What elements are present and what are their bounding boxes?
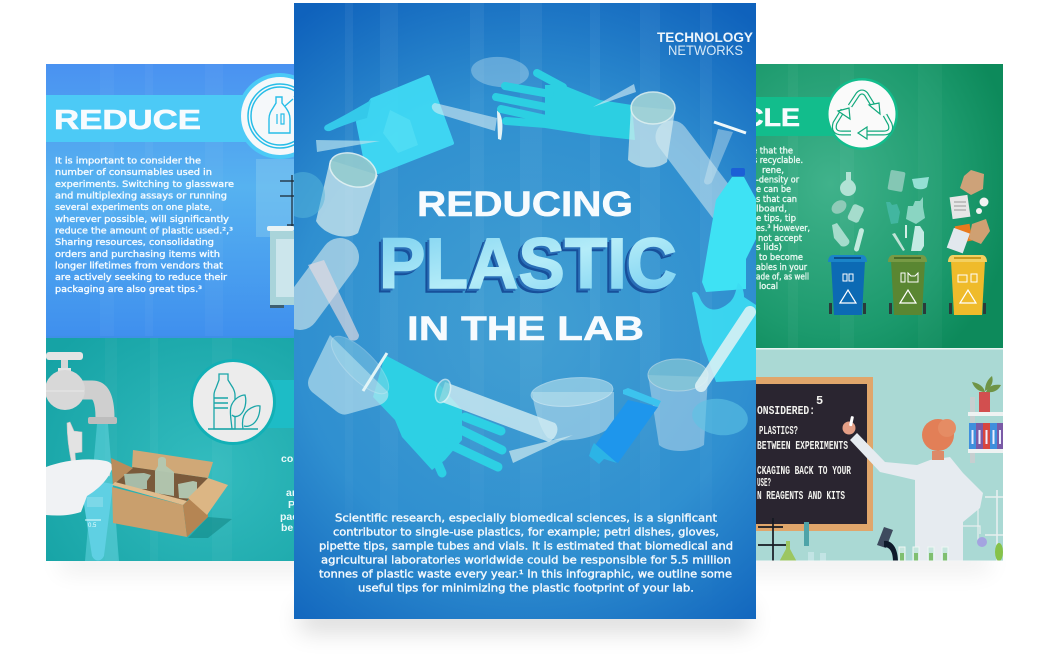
recycle body text: ade of, as well xyxy=(756,272,809,282)
recycle body text: lboard, xyxy=(756,204,787,214)
chalkboard: N REAGENTS AND KITS xyxy=(757,489,845,503)
clipped reuse text: an xyxy=(286,487,298,499)
illustration: small tube left xyxy=(308,260,359,341)
recycle body text: s lids) xyxy=(756,243,782,253)
intro paragraph: pipette tips, sample tubes and vials. It is estimated that biomedical and xyxy=(319,540,733,552)
illustration: petri dish top xyxy=(471,56,529,88)
clipped reuse text: be xyxy=(281,522,293,534)
reduce body text: experiments. Switching to glassware xyxy=(55,180,234,190)
icon: recycle symbol xyxy=(826,78,898,150)
reduce body text: longer lifetimes from vendors that xyxy=(55,262,224,272)
reuse band xyxy=(268,380,294,428)
illustration: tub bottom xyxy=(530,374,614,440)
logo: technology networks: TECHNOLOGY xyxy=(657,30,753,45)
illustration: beaker top right xyxy=(628,92,675,168)
lab bench illustration xyxy=(256,159,294,308)
reduce body text: and multiplexing assays or running xyxy=(55,192,227,202)
recycle body text: e tips, tip xyxy=(756,214,796,224)
illustration: beaker lower right xyxy=(648,359,708,451)
illustration: glove bottom xyxy=(373,355,502,473)
illustration: glove top xyxy=(496,73,635,140)
recycling bin: green xyxy=(888,255,927,315)
left lab stand and flask xyxy=(758,518,826,562)
illustration: petri dish lower right xyxy=(690,395,750,439)
recycle body text: -density or xyxy=(756,176,799,186)
panel: main cover xyxy=(281,3,756,619)
reduce body text: are actively seeking to reduce their xyxy=(55,273,227,283)
illustration: tube: 0.5 xyxy=(88,523,97,529)
reduce body text xyxy=(55,156,234,295)
reduce heading band: REDUCE xyxy=(54,104,201,135)
recycle body text: ables in your xyxy=(756,263,807,273)
reduce body text: number of consumables used in xyxy=(55,168,212,178)
recycle body text xyxy=(752,146,810,292)
recycle body text: s recyclable. xyxy=(753,156,803,166)
illustration: water beam xyxy=(85,424,119,561)
reduce body text: orders and purchasing items with xyxy=(55,250,220,260)
illustration: tube xyxy=(84,482,113,560)
illustration: pipette tip bottom xyxy=(509,435,573,463)
chalkboard: PLASTICS? xyxy=(759,424,798,438)
panel: reuse illustration xyxy=(45,336,298,561)
illustration: cardboard box xyxy=(111,450,232,538)
logo: technology networks xyxy=(657,32,753,55)
illustration: tube cap xyxy=(67,422,110,475)
illustration: large tube left xyxy=(300,257,340,311)
illustration: large tube right xyxy=(672,137,725,207)
shadows beneath panels xyxy=(60,552,990,632)
illustration: blue pipette box xyxy=(589,388,661,464)
recycle body text: s that can xyxy=(756,195,797,205)
illustration: tub left xyxy=(308,328,397,415)
chalkboard: USE? xyxy=(757,476,771,490)
title: IN THE LAB xyxy=(407,310,644,348)
icon: no plastic bottle xyxy=(241,73,294,159)
title: PLASTIC xyxy=(379,225,677,304)
recycle body text: not accept xyxy=(758,234,802,244)
title: REDUCING xyxy=(417,185,633,224)
recycle heading band xyxy=(756,97,834,136)
intro paragraph: agricultural laboratories worldwide could be responsible for 5.5 million xyxy=(321,554,731,566)
reduce heading band xyxy=(46,95,261,142)
illustration: pipette tip top xyxy=(593,84,636,107)
recycle body text: es.³ However, xyxy=(756,224,810,234)
reduce body text: reduce the amount of plastic used.²,³ xyxy=(55,226,233,236)
illustration: small tube right xyxy=(704,122,746,185)
illustration: tube top xyxy=(432,103,502,140)
recycling bin: blue xyxy=(828,255,867,315)
microscope xyxy=(877,527,898,562)
illustration: beaker upper left xyxy=(316,147,381,237)
illustration: petri dish left xyxy=(281,172,325,218)
recycle body text: e can be xyxy=(756,185,791,195)
waste items: paper and card xyxy=(947,170,990,253)
illustration: plastic bag top xyxy=(324,77,452,172)
clipped reuse text: cor xyxy=(281,453,297,465)
panel: recycle xyxy=(743,64,1003,349)
waste items: plastic labware xyxy=(829,172,865,252)
intro paragraph: useful tips for minimizing the plastic footprint of your lab. xyxy=(358,582,694,594)
illustration: pipette tip left xyxy=(316,140,380,152)
clipped reuse text: pac xyxy=(280,511,298,523)
reduce body text: wherever possible, will significantly xyxy=(55,215,229,225)
reduce body text: several experiments on one plate, xyxy=(55,203,212,213)
chalkboard: 5 xyxy=(816,394,823,408)
recycle body text: to become xyxy=(759,253,803,263)
shelves, plant and binders xyxy=(968,376,1003,463)
chalkboard: BETWEEN EXPERIMENTS xyxy=(757,439,848,453)
chalkboard xyxy=(756,377,873,531)
intro paragraph: Scientific research, especially biomedical sciences, is a significant xyxy=(335,512,717,524)
reduce body text: packaging are also great tips.³ xyxy=(55,285,202,295)
test tubes xyxy=(899,547,948,562)
clipped reuse text xyxy=(280,456,294,531)
recycle heading band: CLE xyxy=(743,104,800,132)
icon: bottle and leaves xyxy=(190,359,276,445)
recycling bin: yellow xyxy=(948,255,987,315)
intro paragraph: contributor to single-use plastics, for example; petri dishes, gloves, xyxy=(333,526,719,538)
illustration: bottle right xyxy=(702,168,756,292)
scientist xyxy=(842,416,983,562)
recycle body text: local xyxy=(759,282,778,292)
reduce body text: It is important to consider the xyxy=(55,156,201,166)
illustration: tap xyxy=(45,352,117,424)
panel: reduce xyxy=(46,64,294,336)
chalkboard: CKAGING BACK TO YOUR xyxy=(757,464,852,478)
right lab stand and glassware xyxy=(963,490,1003,560)
reduce body text: Sharing resources, consolidating xyxy=(55,238,214,248)
recycle body text: rene, xyxy=(762,166,784,176)
waste items: plastic film xyxy=(886,170,929,251)
clipped reuse text: P xyxy=(288,499,295,511)
intro paragraph: tonnes of plastic waste every year.¹ In this infographic, we outline some xyxy=(319,568,732,580)
title xyxy=(379,185,677,348)
intro paragraph xyxy=(319,512,733,594)
panel: points to consider xyxy=(756,348,1003,562)
illustration: tube lower right xyxy=(701,312,750,386)
chalkboard: ONSIDERED: xyxy=(757,404,815,418)
illustration: bag lower right xyxy=(692,283,756,382)
logo: technology networks: NETWORKS xyxy=(668,42,743,58)
recycle body text: e that the xyxy=(752,146,793,156)
illustration: long tube bottom xyxy=(433,377,557,442)
illustration: gloved hand xyxy=(46,459,112,516)
